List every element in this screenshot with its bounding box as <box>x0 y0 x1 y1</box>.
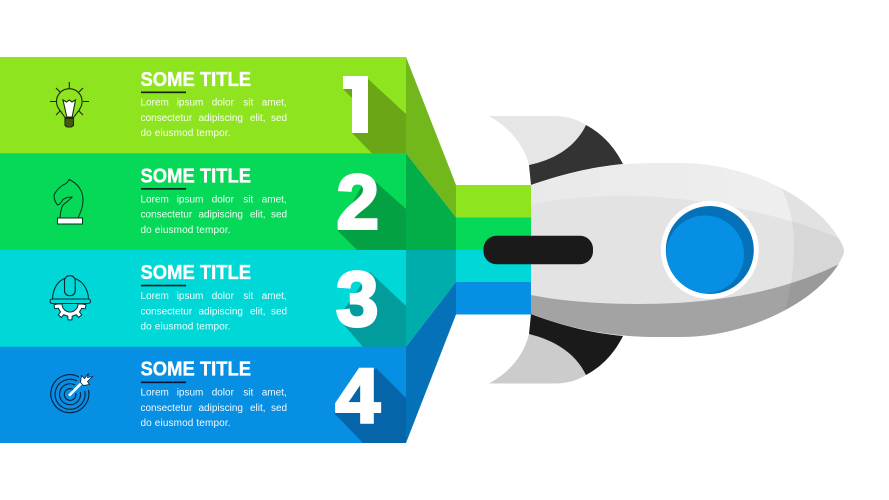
body text 4: adipiscing <box>198 403 243 414</box>
body text 1: Lorem <box>140 98 169 109</box>
long shadow 3 <box>338 272 406 347</box>
funnel connecting the steps to the rocket <box>406 57 456 443</box>
body text 4: dolor <box>212 388 235 399</box>
exhaust colour strips <box>456 185 531 314</box>
body text 1: dolor <box>212 98 235 109</box>
body text 4: consectetur <box>140 403 193 414</box>
top fin <box>489 116 623 185</box>
body text 2: elit, <box>250 210 266 221</box>
icon: helmet and gear <box>50 276 90 320</box>
band 3 <box>0 250 406 347</box>
body text 3: consectetur <box>140 306 193 317</box>
black side bar <box>484 236 593 264</box>
body text 4: sit <box>243 388 254 399</box>
panel 3: cyan step <box>0 250 406 347</box>
title 2: SOME TITLE <box>140 166 251 188</box>
body text 3: adipiscing <box>198 306 243 317</box>
body text 3: ipsum <box>177 291 203 302</box>
band 4 <box>0 347 406 443</box>
body text 3: elit, <box>250 306 266 317</box>
icon: chess knight <box>54 180 83 224</box>
body text 2 <box>140 194 287 236</box>
body text 4: Lorem <box>140 388 169 399</box>
title rule 2 <box>141 188 186 190</box>
porthole <box>661 201 759 299</box>
body text 1: ipsum <box>177 98 203 109</box>
bottom fin <box>489 314 623 384</box>
body text 1: consectetur <box>140 113 193 124</box>
body text 2: dolor <box>212 194 235 205</box>
body text 4: sed <box>271 403 287 414</box>
rocket body <box>531 163 844 337</box>
body text 2: sit <box>243 194 254 205</box>
body text 4: ipsum <box>177 388 203 399</box>
body text 4: do eiusmod tempor. <box>140 418 230 429</box>
body text 1: sit <box>243 98 254 109</box>
body text 1: sed <box>271 113 287 124</box>
body text 2: adipiscing <box>198 210 243 221</box>
body text 1: amet, <box>262 98 287 109</box>
body text 2: do eiusmod tempor. <box>140 225 230 236</box>
title 3: SOME TITLE <box>140 262 251 284</box>
body text 2: Lorem <box>140 194 169 205</box>
number 4: 4 <box>336 354 380 440</box>
number 1 <box>343 76 368 133</box>
body text 3: Lorem <box>140 291 169 302</box>
number 3: 3 <box>336 256 378 342</box>
body text 2: ipsum <box>177 194 203 205</box>
icon: light bulb <box>50 82 89 127</box>
band 1 <box>0 57 406 154</box>
body text 2: consectetur <box>140 210 193 221</box>
body text 3: sed <box>271 306 287 317</box>
body text 4: elit, <box>250 403 266 414</box>
body text 2: amet, <box>262 194 287 205</box>
body text 1: adipiscing <box>198 113 243 124</box>
panel 1: lime step <box>0 57 406 154</box>
body text 2: sed <box>271 210 287 221</box>
number shadow flag 1 <box>343 89 352 98</box>
body text 3: amet, <box>262 291 287 302</box>
title rule 1 <box>141 92 186 93</box>
title 1: SOME TITLE <box>140 69 251 91</box>
panel 4: blue step <box>0 347 406 443</box>
long shadow 4 <box>334 368 406 443</box>
number 1: 1 <box>334 63 377 149</box>
long shadow 2 <box>337 175 406 250</box>
long shadow 1 <box>352 78 406 154</box>
body text 3 <box>140 291 287 332</box>
body text 3: do eiusmod tempor. <box>140 322 230 332</box>
body text 3: sit <box>243 291 254 302</box>
title rule 3 <box>141 285 186 286</box>
body text 3: dolor <box>212 291 235 302</box>
infographic canvas <box>0 57 844 443</box>
body text 1: do eiusmod tempor. <box>140 128 230 139</box>
body text 4: amet, <box>262 388 287 399</box>
body text 4 <box>140 388 287 429</box>
rocket <box>484 116 850 384</box>
icon: target with dart <box>51 374 92 413</box>
title rule 4 <box>141 382 186 383</box>
band 2 <box>0 153 406 250</box>
title 4: SOME TITLE <box>140 359 251 381</box>
body text 1 <box>140 98 287 139</box>
panel 2: green step <box>0 153 406 250</box>
number 2: 2 <box>336 160 379 246</box>
body text 1: elit, <box>250 113 266 124</box>
